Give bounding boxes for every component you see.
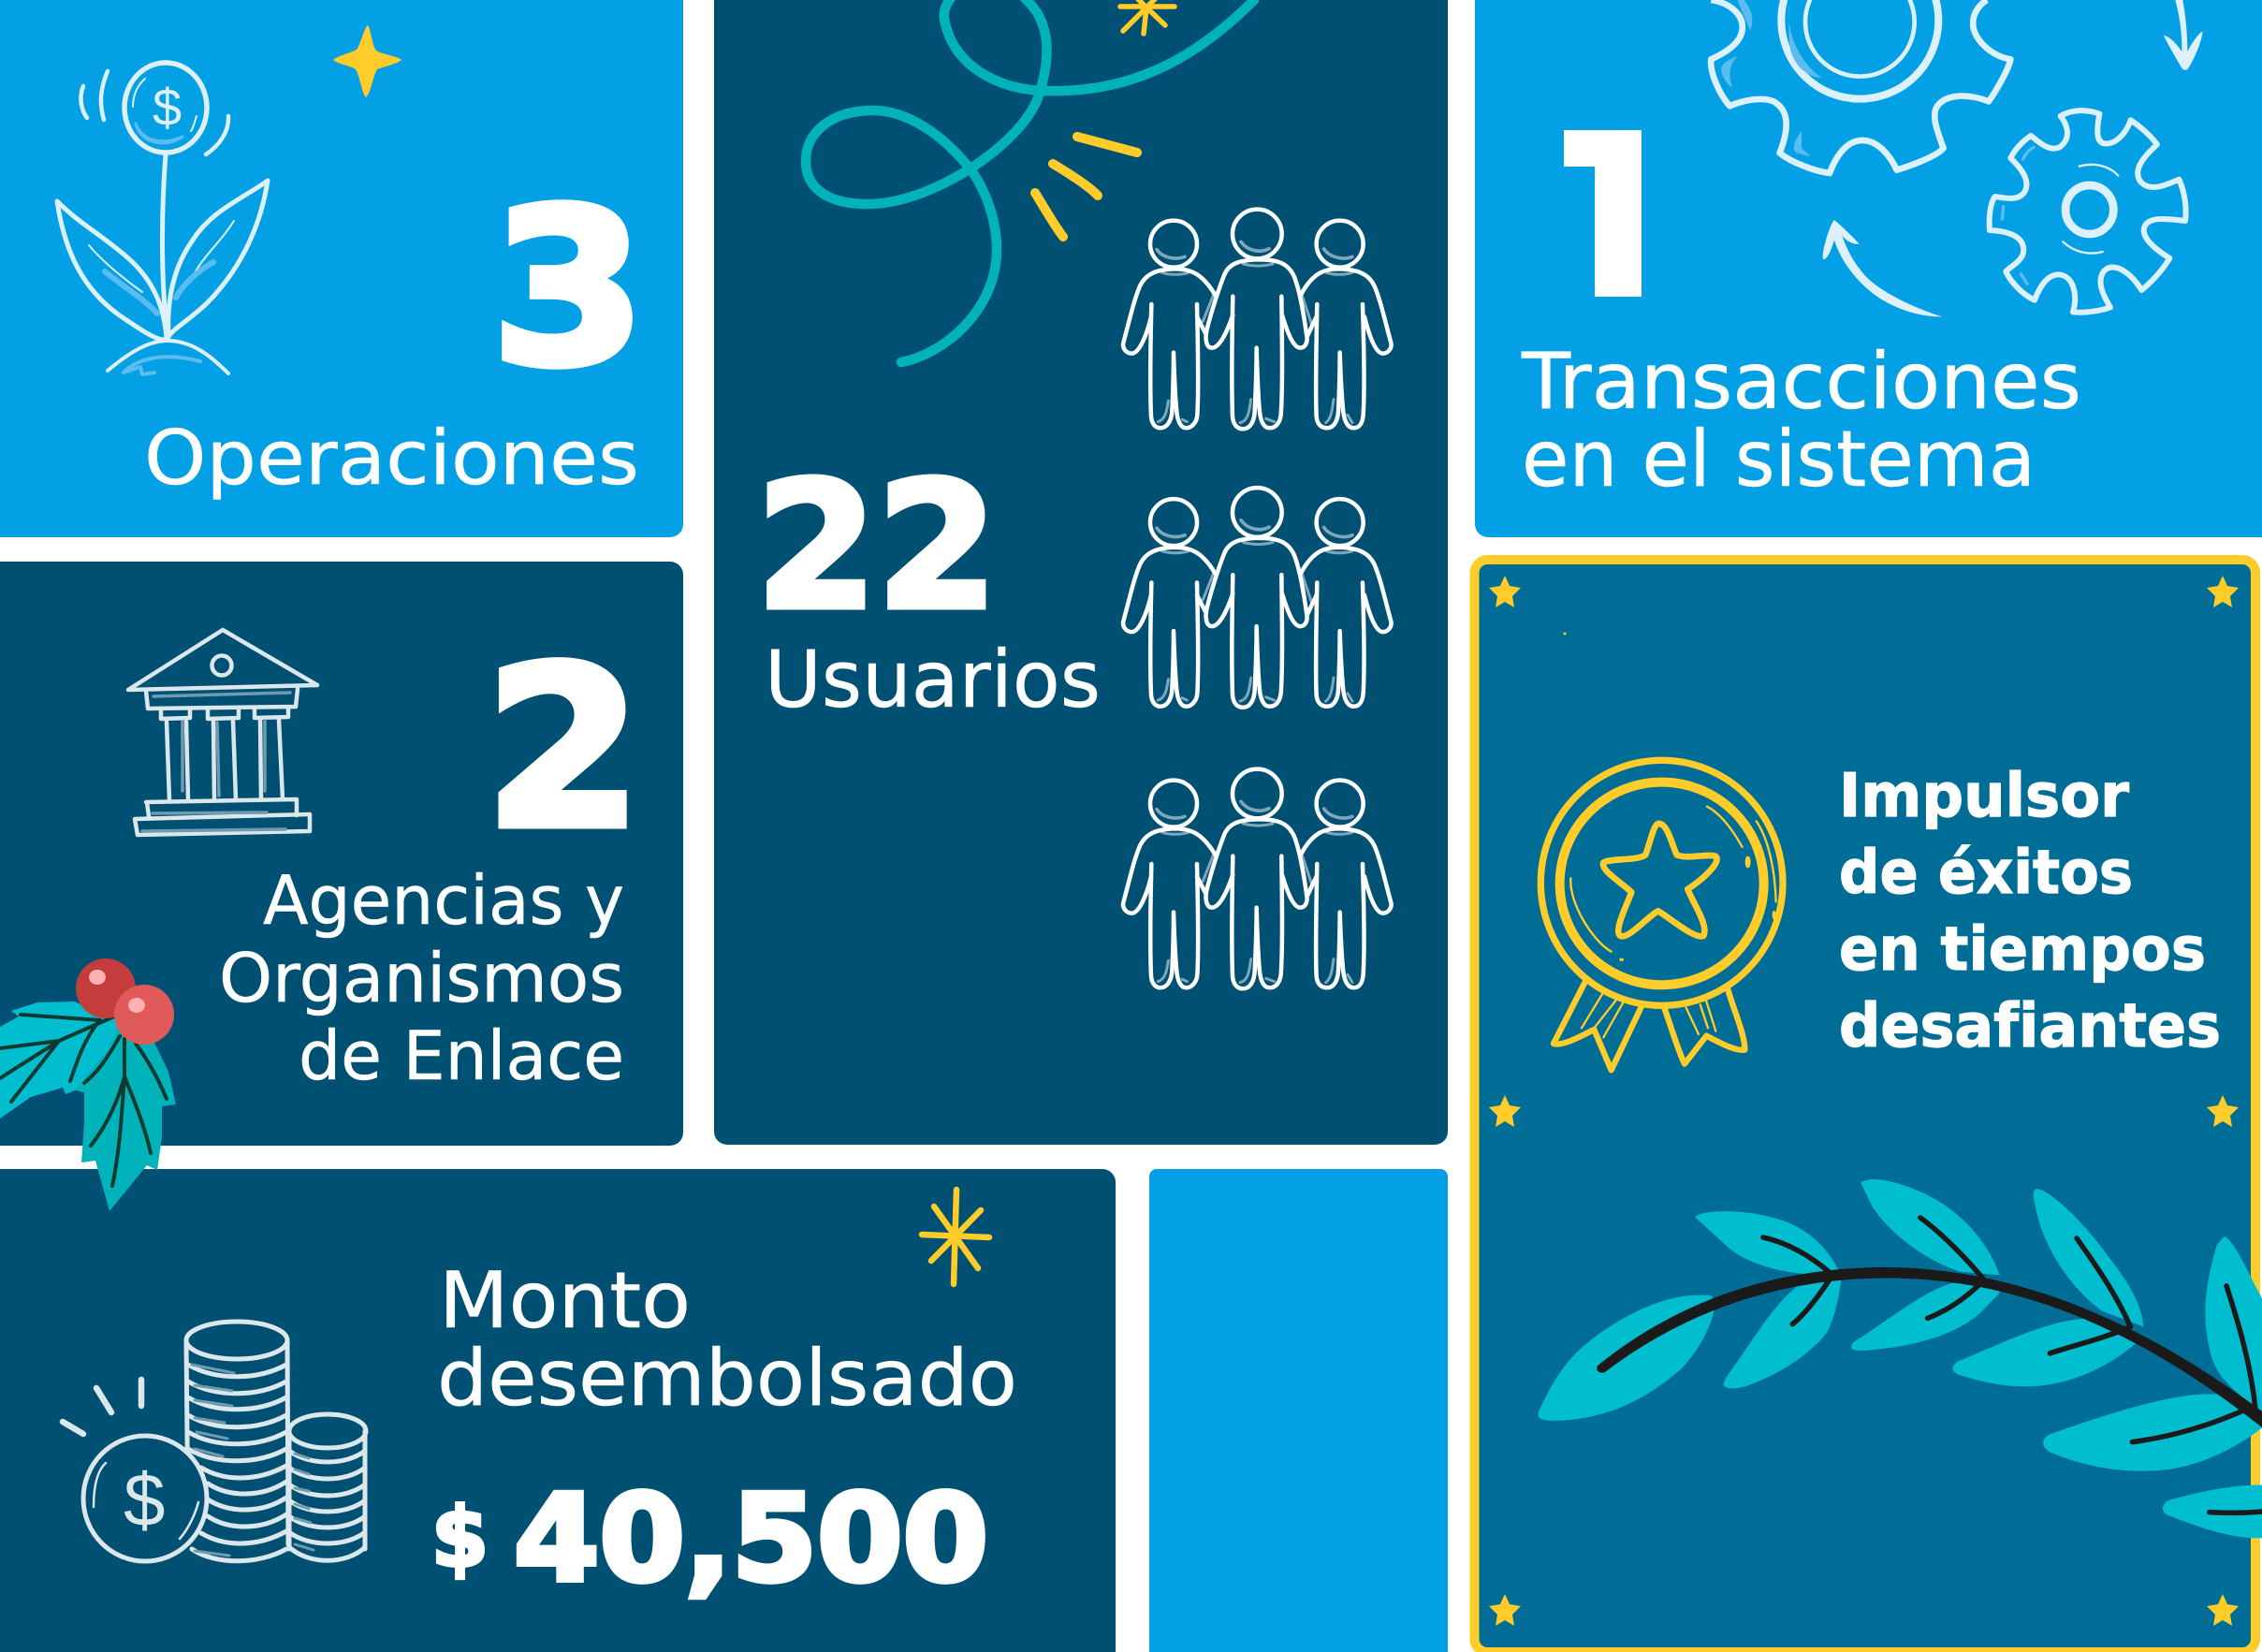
amount: 40,500: $ <box>431 1489 489 1586</box>
label: monto desembolsado: desembolsado <box>437 1333 1017 1424</box>
holly decoration <box>0 958 176 1211</box>
number: 2: 2 <box>485 621 642 877</box>
label: transacciones en el sistema: en el sistema <box>1522 414 2036 504</box>
label: agencias y organismos de enlace <box>219 861 624 1095</box>
icon: people row 1 <box>1123 210 1392 429</box>
heading: impulsor de éxitos en tiempos desafiantes: en tiempos <box>1839 915 2206 985</box>
label: monto desembolsado <box>437 1255 1017 1424</box>
panel: operaciones <box>0 0 683 537</box>
burst rays <box>1035 137 1137 237</box>
small gold stars <box>1489 576 2239 1626</box>
label: agencias y organismos de enlace: Organismos <box>219 939 624 1017</box>
label: agencias y organismos de enlace: de Enlace <box>299 1016 624 1095</box>
panel: impulsor de éxitos <box>1475 560 2262 1652</box>
dollar symbol: $ <box>153 78 182 137</box>
icon: small gear <box>1990 110 2186 313</box>
arrow: lower curved <box>1823 220 1942 316</box>
icon: bank building <box>128 630 317 835</box>
label: transacciones en el sistema <box>1521 336 2081 504</box>
heading: impulsor de éxitos en tiempos desafiantes: Impulsor <box>1839 762 2129 831</box>
asterisk <box>922 1190 989 1284</box>
sparkle star <box>333 25 401 97</box>
icon: people row 3 <box>1123 769 1392 988</box>
amount: 40,500: 40,500 <box>514 1469 988 1609</box>
label: operaciones: Operaciones <box>144 415 639 502</box>
asterisk <box>1120 0 1175 34</box>
icon: money plant <box>57 63 268 374</box>
coin dollar symbol: $ <box>124 1458 165 1542</box>
heading: impulsor de éxitos en tiempos desafiantes: desafiantes <box>1839 992 2221 1061</box>
arrow: upper right <box>2164 0 2202 70</box>
panel: usuarios <box>714 0 1448 1145</box>
number: 22: 22 <box>756 445 998 648</box>
panel: transacciones <box>1475 0 2262 537</box>
number: 1: 1 <box>1554 86 1684 347</box>
heading: impulsor de éxitos en tiempos desafiantes: de éxitos <box>1839 839 2133 908</box>
panel: monto desembolsado <box>0 1169 1116 1652</box>
panel: agencias y organismos <box>0 562 683 1146</box>
decorative swirl <box>806 0 1254 362</box>
panel: blue block <box>1149 1169 1448 1652</box>
number: 3: 3 <box>491 164 646 413</box>
icon: medal <box>1540 760 1783 1070</box>
label: transacciones en el sistema: Transacciones <box>1521 336 2081 427</box>
laurel branch <box>1539 1179 2262 1538</box>
label: agencias y organismos de enlace: Agencias y <box>263 861 624 940</box>
icon: coins <box>63 1322 366 1561</box>
heading: impulsor de éxitos en tiempos desafiantes <box>1839 762 2221 1061</box>
icon: big gear <box>1711 0 2010 173</box>
icon: people row 2 <box>1123 488 1392 708</box>
label: monto desembolsado: Monto <box>439 1255 691 1346</box>
label: usuarios: Usuarios <box>765 634 1101 725</box>
